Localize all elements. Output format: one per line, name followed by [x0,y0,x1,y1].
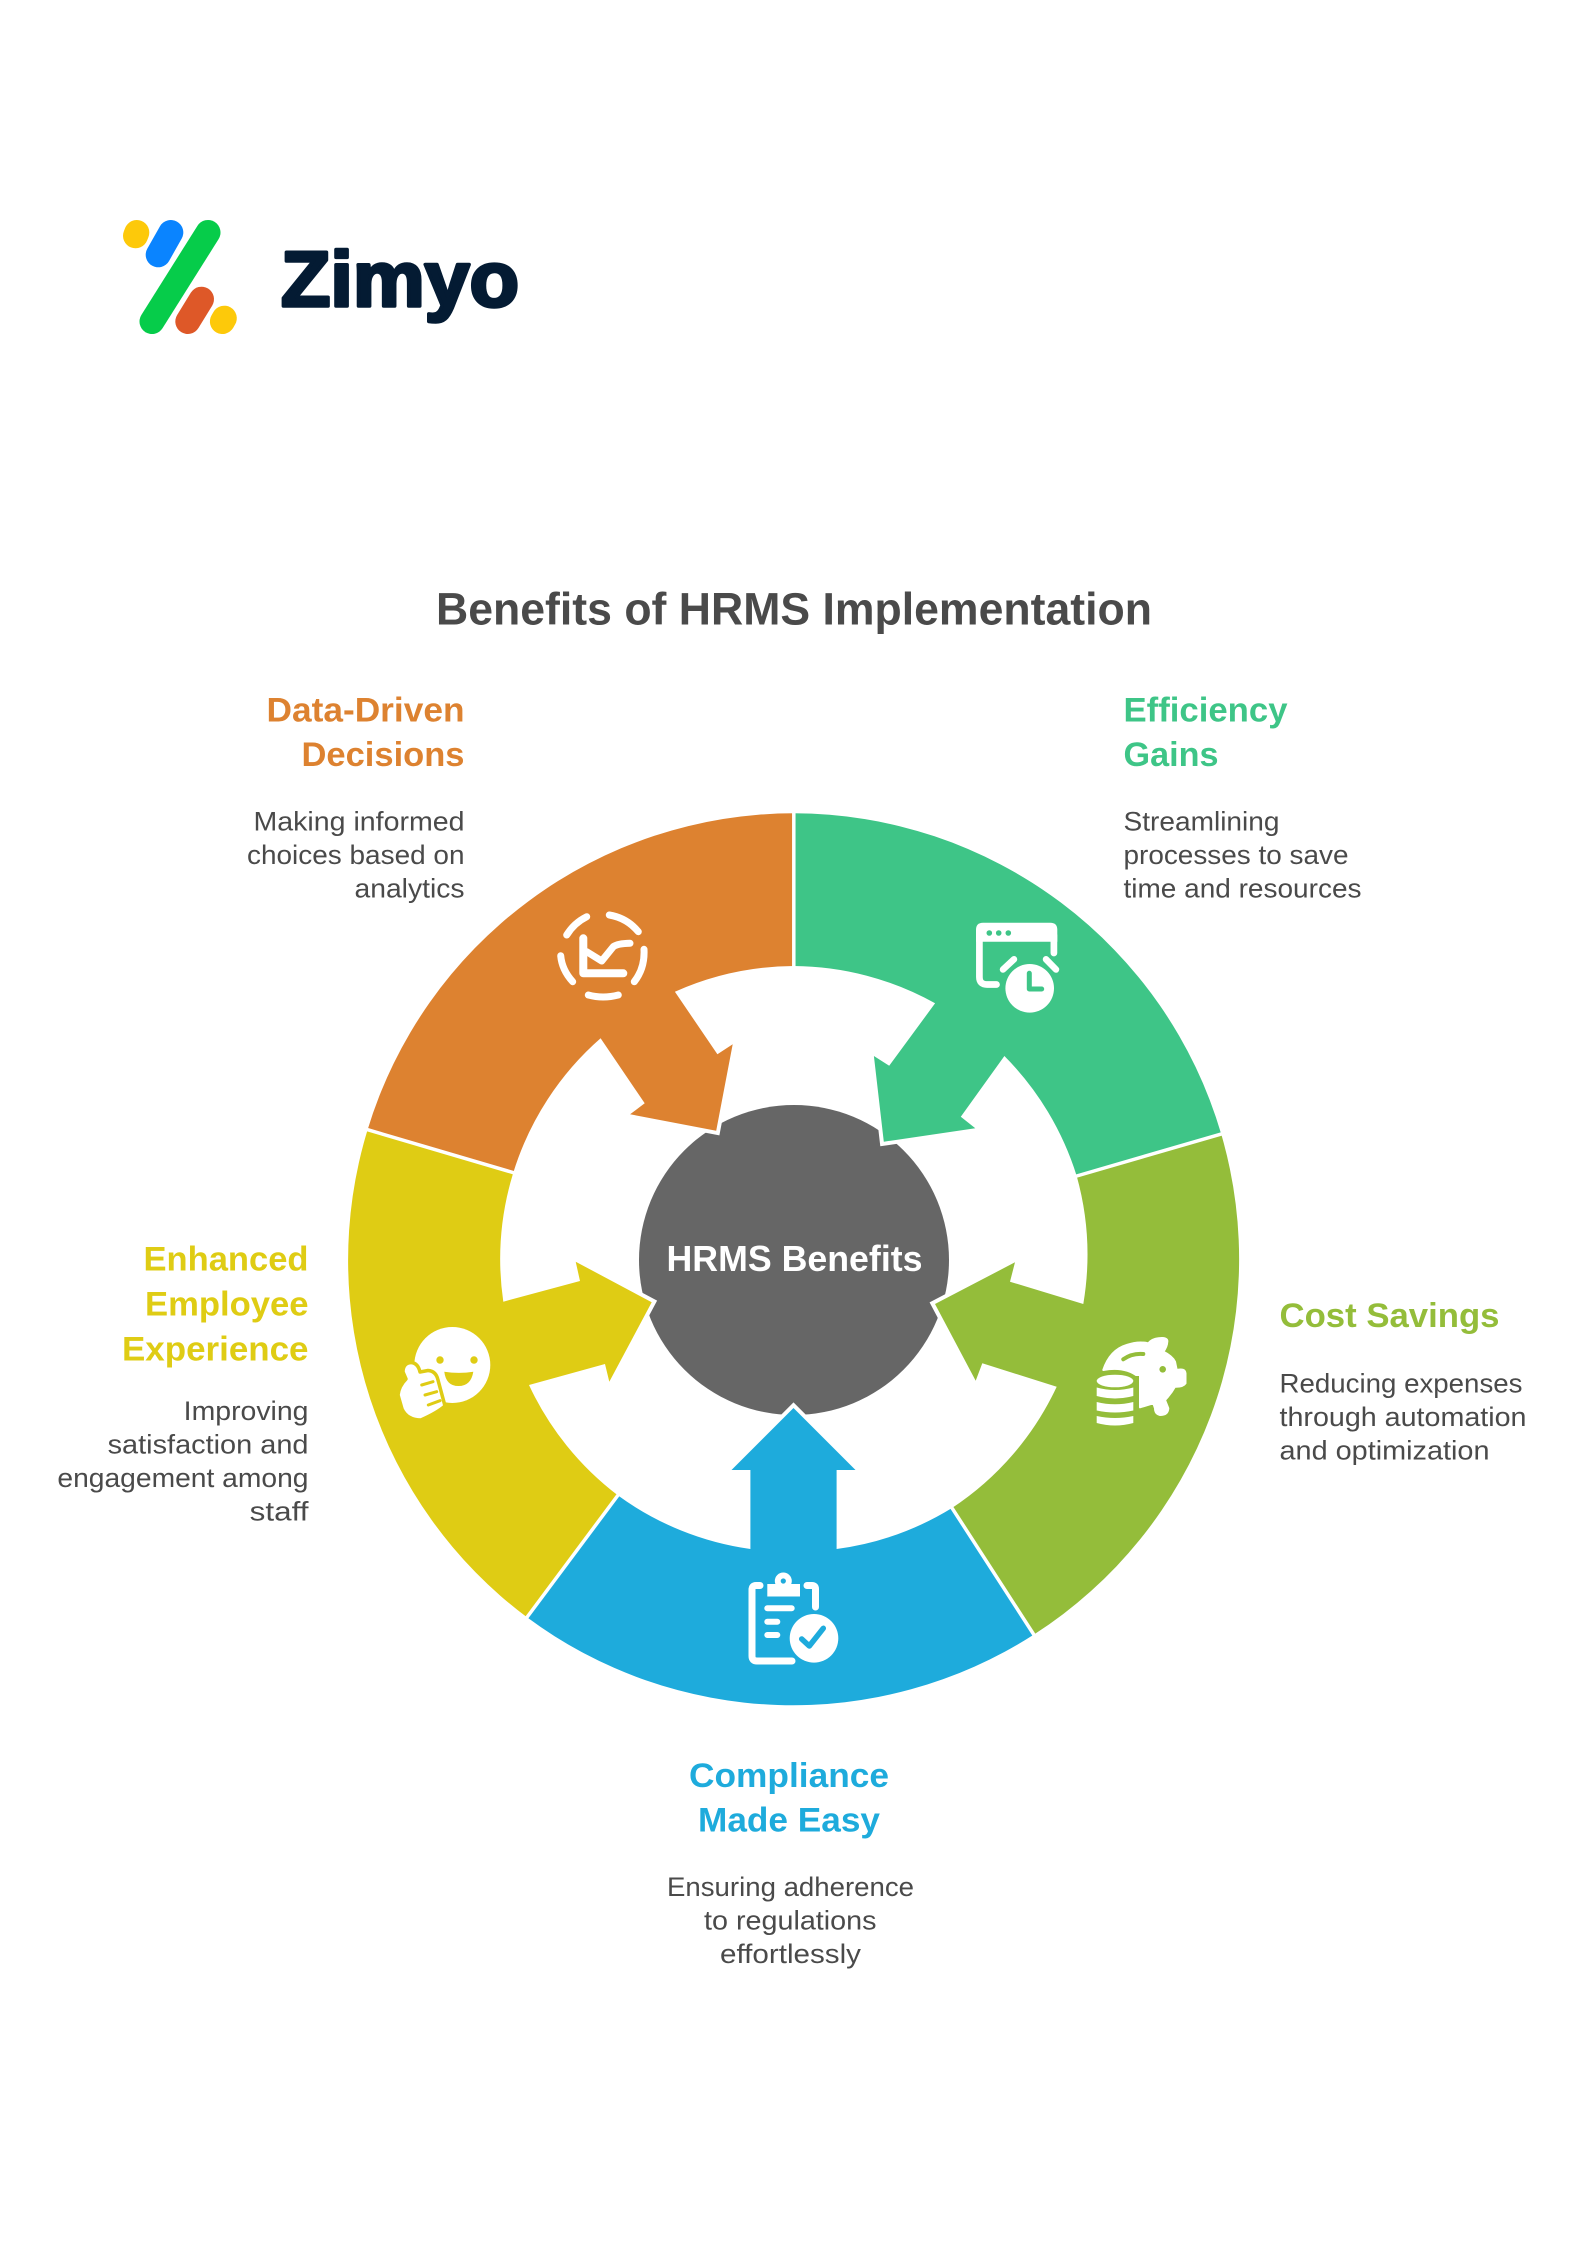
description: cost savings: through automation [1280,1402,1526,1432]
heading: data-driven decisions [266,692,464,774]
heading: enhanced employee experience: Employee [145,1286,308,1324]
heading: data-driven decisions: Data-Driven [266,692,464,730]
description: enhanced employee experience: satisfaction and [108,1430,308,1460]
heading: data-driven decisions: Decisions [302,736,464,774]
description: compliance made easy: Ensuring adherence [667,1872,914,1902]
description: compliance made easy: to regulations [704,1906,876,1936]
description: enhanced employee experience: staff [250,1496,309,1526]
description: efficiency gains: Streamlining [1124,806,1280,836]
center circle [639,1105,949,1415]
label: data-driven decisions [247,692,464,904]
heading: enhanced employee experience [122,1240,308,1368]
description: data-driven decisions: choices based on [247,840,464,870]
icon: analytics chart [561,915,644,997]
heading: efficiency gains: Efficiency [1124,692,1288,730]
logo mark [136,232,224,322]
center label: HRMS Benefits [666,1238,922,1279]
icon: browser window with alarm clock [976,923,1057,1013]
heading: compliance made easy [689,1757,889,1840]
heading: compliance made easy: Made Easy [698,1802,880,1840]
segment: cost savings [935,1134,1239,1635]
description: cost savings [1280,1368,1526,1466]
description: data-driven decisions: analytics [354,874,464,904]
description: cost savings: Reducing expenses [1280,1368,1522,1398]
logo: Zimyo [136,232,519,323]
description: compliance made easy: effortlessly [720,1939,862,1969]
description: compliance made easy [667,1872,914,1969]
segment: compliance made easy [527,1408,1034,1705]
heading: enhanced employee experience: Enhanced [144,1240,308,1278]
label: enhanced employee experience [57,1240,309,1526]
icon: piggy bank with coins [1094,1338,1186,1426]
icon: clipboard with check mark [752,1572,838,1663]
description: data-driven decisions: Making informed [254,806,464,836]
description: enhanced employee experience: Improving [184,1396,308,1426]
description: efficiency gains [1124,806,1362,904]
description: efficiency gains: time and resources [1124,874,1362,904]
arrow tip halos [576,1044,1015,1470]
description: cost savings: and optimization [1280,1436,1490,1466]
heading: enhanced employee experience: Experience [122,1330,308,1368]
description: enhanced employee experience [57,1396,309,1526]
label: cost savings [1280,1297,1526,1466]
label: efficiency gains [1124,692,1362,904]
segment: efficiency gains [794,813,1221,1176]
label: compliance made easy [667,1757,914,1969]
heading: cost savings: Cost Savings [1280,1297,1500,1335]
segment: enhanced employee experience [348,1130,652,1617]
segment: data-driven decisions [368,813,794,1173]
title: Benefits of HRMS Implementation [436,584,1152,634]
heading: compliance made easy: Compliance [689,1757,889,1795]
icon: smiling face with thumbs up [398,1327,490,1420]
description: efficiency gains: processes to save [1124,840,1348,870]
logo wordmark: Zimyo [281,235,519,323]
description: data-driven decisions [247,806,464,904]
heading: efficiency gains [1124,692,1288,774]
description: enhanced employee experience: engagement among [57,1463,309,1493]
heading: efficiency gains: Gains [1124,736,1218,774]
